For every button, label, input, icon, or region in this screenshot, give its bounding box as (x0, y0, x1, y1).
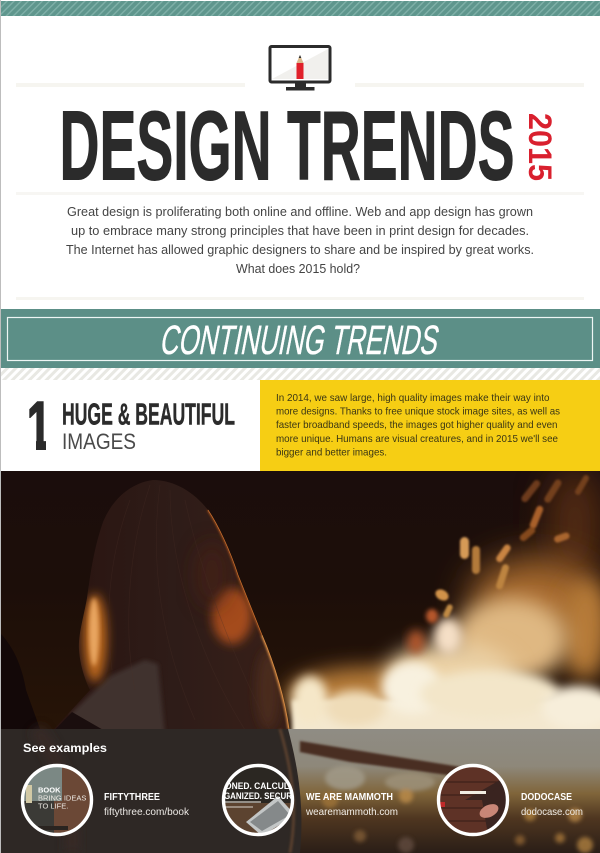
example: dodocase (438, 765, 583, 837)
fire haze (285, 465, 600, 735)
intro text: The Internet has allowed graphic designers to share and be inspired by great works. (66, 242, 534, 257)
intro text (66, 204, 534, 276)
header rule left (16, 83, 245, 87)
example: we are mammoth: wearemammoth.com (305, 806, 398, 818)
trend heading: IMAGES (62, 429, 136, 454)
example: we are mammoth: ONED. CALCUL (225, 781, 289, 792)
left foreground figure (1, 634, 40, 729)
title year: 2015 (522, 113, 558, 181)
example: fiftythree: fiftythree.com/book (104, 806, 190, 818)
top striped band (1, 1, 600, 16)
example: dodocase: dodocase.com (521, 806, 583, 818)
example: fiftythree: BOOK (38, 786, 61, 794)
example: we are mammoth (223, 765, 398, 837)
example: fiftythree: TO LIFE. (38, 802, 68, 810)
woman silhouette (54, 480, 290, 729)
title rule (16, 192, 584, 195)
yellow description panel: faster broadband speeds, the images got higher quality and even (276, 419, 558, 431)
example: fiftythree (22, 765, 190, 837)
header rule right (355, 83, 584, 87)
sparks (433, 474, 590, 619)
example: we are mammoth: GANIZED. SECUR (224, 791, 292, 802)
examples overlay band (1, 729, 600, 853)
intro rule (16, 297, 584, 300)
intro text: What does 2015 hold? (236, 261, 360, 276)
icon: monitor with pencil (270, 46, 330, 90)
example: fiftythree: BRING IDEAS (38, 794, 86, 802)
striped divider (1, 368, 600, 380)
example: dodocase: DODOCASE (521, 792, 572, 803)
yellow description panel (260, 380, 600, 471)
examples heading: See examples (23, 741, 107, 755)
section banner: continuing trends (1, 309, 600, 368)
example: we are mammoth: WE ARE MAMMOTH (306, 792, 393, 803)
intro text: Great design is proliferating both online and offline. Web and app design has grown (67, 204, 533, 219)
page edge (0, 0, 1, 853)
trend number 1: 1 (27, 388, 51, 464)
trend heading (62, 397, 235, 454)
yellow description panel: more designs. Thanks to free unique stock image sites, as well as (276, 406, 560, 418)
yellow description panel: In 2014, we saw large, high quality images make their way into (276, 392, 550, 404)
yellow description panel: bigger and better images. (276, 446, 387, 458)
section banner: continuing trends: CONTINUING TRENDS (157, 317, 443, 363)
intro text: up to embrace many strong principles that have been in print design for decades. (71, 223, 529, 238)
example: fiftythree: FIFTYTHREE (104, 792, 160, 803)
yellow description panel: more unique. Humans are visual creatures, and in 2015 we'll see (276, 433, 558, 445)
photo: woman by the fire (0, 465, 600, 853)
trend heading: HUGE & BEAUTIFUL (62, 397, 235, 432)
